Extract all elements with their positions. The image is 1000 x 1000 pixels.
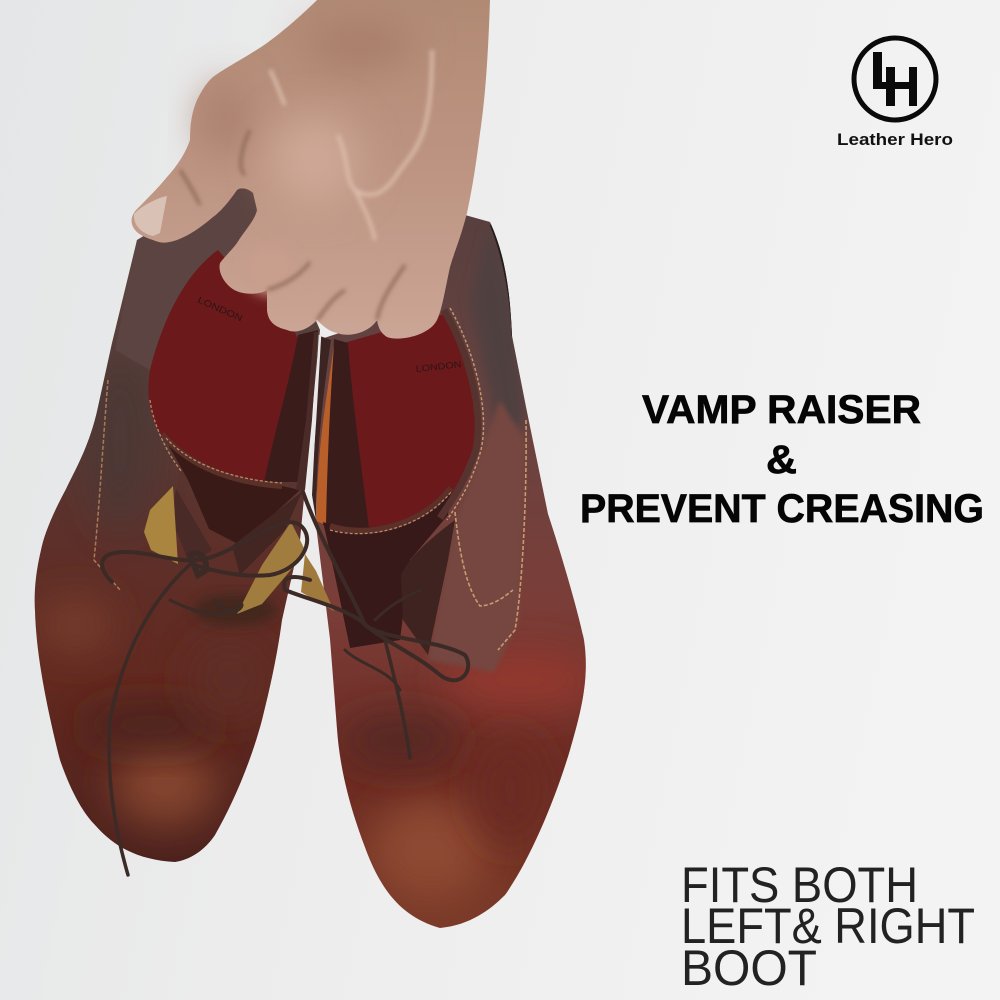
logo: Leather Hero (837, 38, 953, 149)
left insole (148, 250, 298, 482)
subheading: fits both: LEFT& RIGHT (681, 898, 975, 954)
photo: laces (102, 492, 468, 875)
right tongue (323, 490, 451, 648)
left shoe collar (115, 170, 262, 370)
insole brand marks (196, 295, 462, 374)
logo wordmark: Leather Hero (837, 130, 953, 149)
insole brand marks: LONDON (196, 295, 244, 323)
photo: right shoe (301, 215, 600, 928)
heading: PREVENT CREASING (580, 487, 984, 531)
suede flaps (144, 486, 178, 564)
heading (580, 388, 984, 531)
heading: VAMP RAISER (642, 388, 921, 432)
logo ring (854, 38, 936, 120)
suede tongue right (301, 554, 334, 611)
left tongue (162, 434, 300, 545)
photo: left shoe (35, 170, 320, 862)
right shoe insole (323, 314, 476, 528)
subheading: fits both: FITS BOTH (681, 857, 918, 913)
heading: & (766, 438, 797, 482)
subheading: fits both: BOOT (681, 940, 817, 996)
logo monogram LH (873, 52, 917, 106)
right shoe stitching (455, 420, 526, 650)
insole brand marks: LONDON (415, 359, 462, 374)
photo: hand (132, 0, 490, 339)
vamp panel (428, 400, 526, 672)
subheading: fits both (681, 857, 975, 996)
